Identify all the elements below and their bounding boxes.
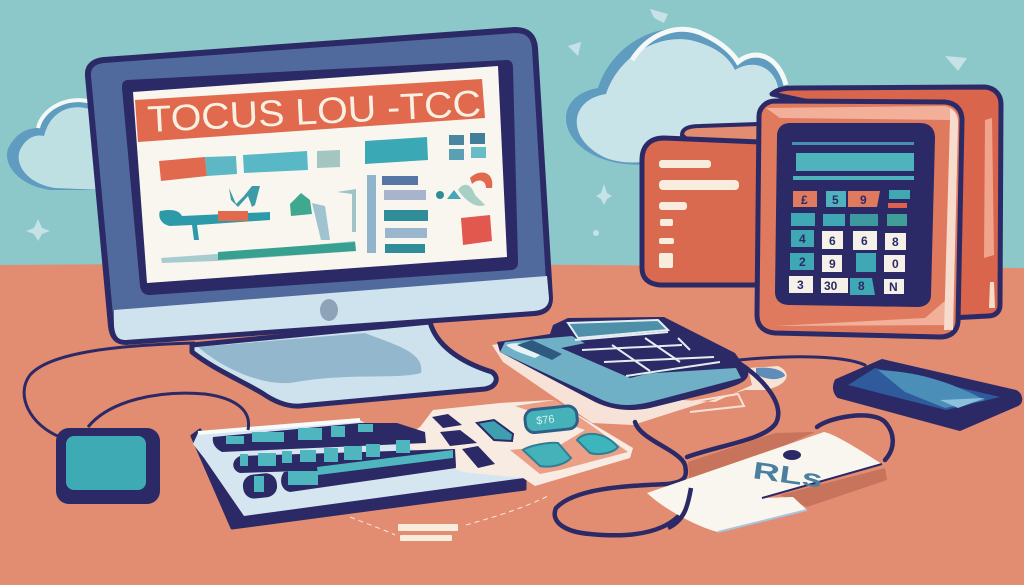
keypad body xyxy=(500,336,741,405)
monitor xyxy=(88,30,550,342)
background wall xyxy=(0,0,1024,270)
key glyphs: 4 xyxy=(799,232,806,246)
keypad grid lines xyxy=(575,332,720,376)
teal keys xyxy=(226,424,453,492)
card lower edge xyxy=(718,510,807,532)
key glyphs: 8 xyxy=(892,235,899,249)
monitor chin xyxy=(114,276,549,340)
key glyphs: 8 xyxy=(858,279,865,293)
display xyxy=(796,153,914,171)
key glyphs: 9 xyxy=(829,257,836,271)
keypad underside xyxy=(492,335,787,425)
number pad plate xyxy=(395,400,633,486)
monitor button xyxy=(320,299,338,321)
calculator keys xyxy=(789,190,910,295)
calculator body xyxy=(757,101,962,337)
sparkles xyxy=(26,9,967,241)
keyboard xyxy=(192,400,633,528)
key glyphs: 9 xyxy=(860,193,867,207)
calculator highlights xyxy=(766,106,958,326)
calculator face xyxy=(775,123,935,307)
smartphone xyxy=(834,360,1021,430)
folder xyxy=(642,138,762,285)
card mark: RLs xyxy=(751,457,824,494)
mouse xyxy=(56,428,160,504)
keyboard shadow xyxy=(192,430,525,528)
monitor stand xyxy=(192,322,496,406)
left cables xyxy=(24,343,249,437)
right cloud xyxy=(566,29,788,165)
key glyphs: 6 xyxy=(829,234,836,248)
screen frame xyxy=(122,60,518,295)
desk surface xyxy=(0,263,1024,585)
phone screen xyxy=(848,368,1000,410)
keypad top bar xyxy=(568,320,668,338)
keypad button right xyxy=(577,434,618,454)
key glyphs: 2 xyxy=(799,255,806,269)
key glyphs: 0 xyxy=(892,257,899,271)
card hole xyxy=(783,450,801,460)
round key xyxy=(242,472,278,500)
keypad grid xyxy=(561,338,714,378)
back panel of calculator device xyxy=(772,87,1001,318)
header banner xyxy=(135,79,485,142)
card body xyxy=(647,432,882,532)
keypad highlight xyxy=(506,343,545,358)
key glyphs: 6 xyxy=(861,234,868,248)
folder tab xyxy=(682,124,760,142)
keyboard plate xyxy=(193,420,524,516)
left cloud xyxy=(7,100,105,190)
price tag card xyxy=(647,432,887,532)
calculator xyxy=(757,101,962,337)
right cables xyxy=(555,357,893,535)
key glyphs: 3 xyxy=(797,278,804,292)
key glyphs: 5 xyxy=(832,193,839,207)
key glyphs xyxy=(797,193,899,294)
card shadow xyxy=(688,432,815,488)
top key row xyxy=(213,423,426,452)
side key xyxy=(477,420,513,441)
banner title: TOCUS LOU -TCC xyxy=(146,83,482,140)
card edge line xyxy=(762,464,882,498)
keypad button left xyxy=(523,443,571,467)
screen widgets xyxy=(159,133,492,263)
display key digits: $76 xyxy=(536,413,555,427)
bottom key row xyxy=(281,460,456,492)
central keypad device xyxy=(492,317,787,425)
button wells xyxy=(510,400,628,474)
card shadow lower xyxy=(780,468,887,507)
key glyphs: N xyxy=(889,280,898,294)
display key xyxy=(524,405,578,433)
dashed connector and label xyxy=(350,495,550,541)
centre key column xyxy=(432,414,495,468)
key glyphs: 30 xyxy=(824,279,838,293)
keypad outline xyxy=(497,317,748,410)
middle key row xyxy=(233,449,456,473)
key glyphs: £ xyxy=(801,193,808,207)
screen xyxy=(133,66,507,283)
monitor casing xyxy=(88,30,550,342)
